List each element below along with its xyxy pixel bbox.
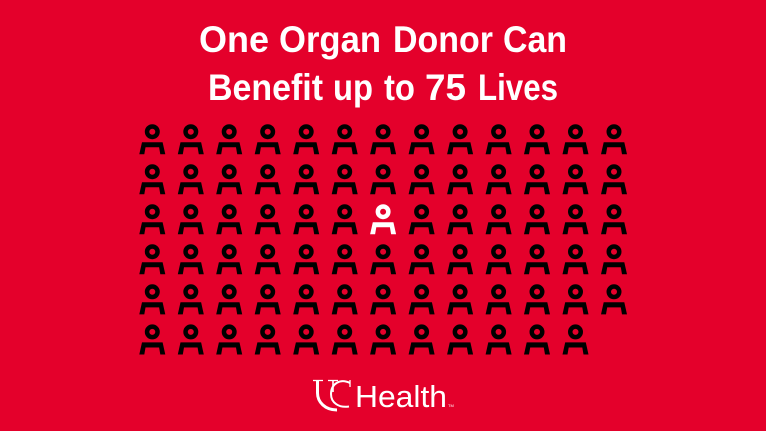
row 2 of people [139, 166, 627, 194]
row 4 of people [139, 246, 627, 274]
title: Benefit [208, 67, 323, 108]
title: 75 [425, 67, 466, 108]
title: Donor [393, 19, 493, 60]
title [199, 19, 567, 108]
row 3 of people [139, 206, 627, 234]
title: Organ [279, 19, 381, 60]
trademark symbol: TM [448, 403, 454, 408]
row 5 of people [139, 287, 627, 314]
title: Lives [478, 67, 558, 108]
title: One [199, 19, 269, 60]
icon: white donor person [370, 206, 396, 234]
row 6 of people [139, 327, 589, 354]
wordmark: Health: Health [355, 379, 447, 414]
logo: UC Health [313, 379, 454, 414]
title: to [384, 67, 415, 108]
icon: UC monogram [313, 380, 350, 410]
row 1 of people [139, 126, 627, 154]
title: Can [503, 19, 567, 60]
title: up [333, 67, 373, 108]
pictogram: people grid [139, 126, 627, 354]
